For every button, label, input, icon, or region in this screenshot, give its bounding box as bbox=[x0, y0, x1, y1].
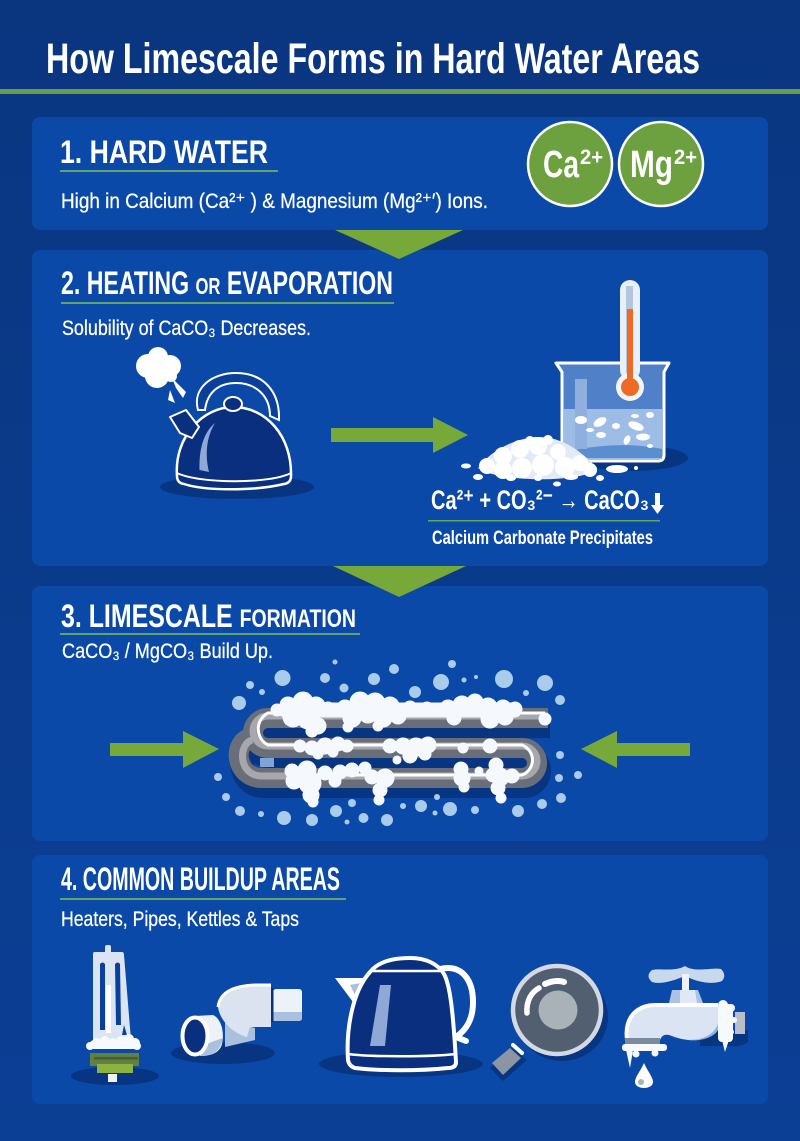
icon: precipitate pile bbox=[461, 435, 638, 486]
panel: heating or evaporation bbox=[32, 250, 768, 566]
icon: magnesium ion: Mg bbox=[630, 144, 673, 186]
icon: calcium ion: Ca bbox=[543, 144, 580, 186]
text: hard water description: High in Calcium (Ca²⁺ ) & Magnesium (Mg²⁺′) Ions. bbox=[61, 190, 488, 213]
icon: steaming kettle bbox=[136, 347, 314, 499]
icon: electric kettle bbox=[319, 958, 483, 1077]
arrow: step 2 to 3 bbox=[333, 566, 466, 597]
text: build up: CaCO₃ / MgCO₃ Build Up. bbox=[62, 640, 273, 663]
icon: beaker with thermometer and precipitate bbox=[461, 280, 688, 486]
text: caption: Calcium Carbonate Precipitates bbox=[432, 528, 653, 549]
panel: hard water bbox=[32, 117, 768, 230]
text: solubility: Solubility of CaCO₃ Decreases. bbox=[62, 317, 311, 340]
text: buildup locations: Heaters, Pipes, Kettles & Taps bbox=[61, 908, 299, 931]
icon: pipe elbow bbox=[171, 985, 302, 1064]
arrow: step 1 to 2 bbox=[335, 230, 463, 259]
icon: pan bbox=[490, 966, 608, 1081]
arrow: left inward bbox=[110, 731, 219, 768]
bubbles bbox=[214, 660, 582, 826]
text: precipitation equation: Ca²⁺ + CO₃²⁻ → CaCO₃ bbox=[431, 485, 649, 515]
panel: limescale formation bbox=[32, 586, 768, 841]
heading: limescale formation: 3. LIMESCALE FORMATION bbox=[61, 598, 356, 634]
arrow: right inward bbox=[581, 731, 690, 768]
heading: hard water: 1. HARD WATER bbox=[60, 134, 268, 170]
title rule bbox=[0, 89, 800, 94]
icon: thermometer bbox=[616, 280, 644, 401]
icon: magnesium ion: 2+ bbox=[674, 146, 697, 169]
icon: heating coil with limescale bbox=[214, 660, 582, 826]
icon: heating element bbox=[71, 945, 159, 1085]
icon: dripping tap bbox=[622, 966, 748, 1088]
arrow: kettle to beaker bbox=[331, 417, 468, 453]
heading: common buildup areas: 4. COMMON BUILDUP AREAS bbox=[61, 861, 340, 897]
heading: heating or evaporation: 2. HEATING OR EVAPORATION bbox=[61, 265, 393, 301]
panel: common buildup areas bbox=[32, 855, 768, 1104]
icon: calcium ion: 2+ bbox=[580, 146, 603, 169]
icon: calcium ion bbox=[528, 122, 612, 206]
limescale deposits bbox=[272, 693, 550, 806]
icon: magnesium ion bbox=[619, 122, 703, 206]
